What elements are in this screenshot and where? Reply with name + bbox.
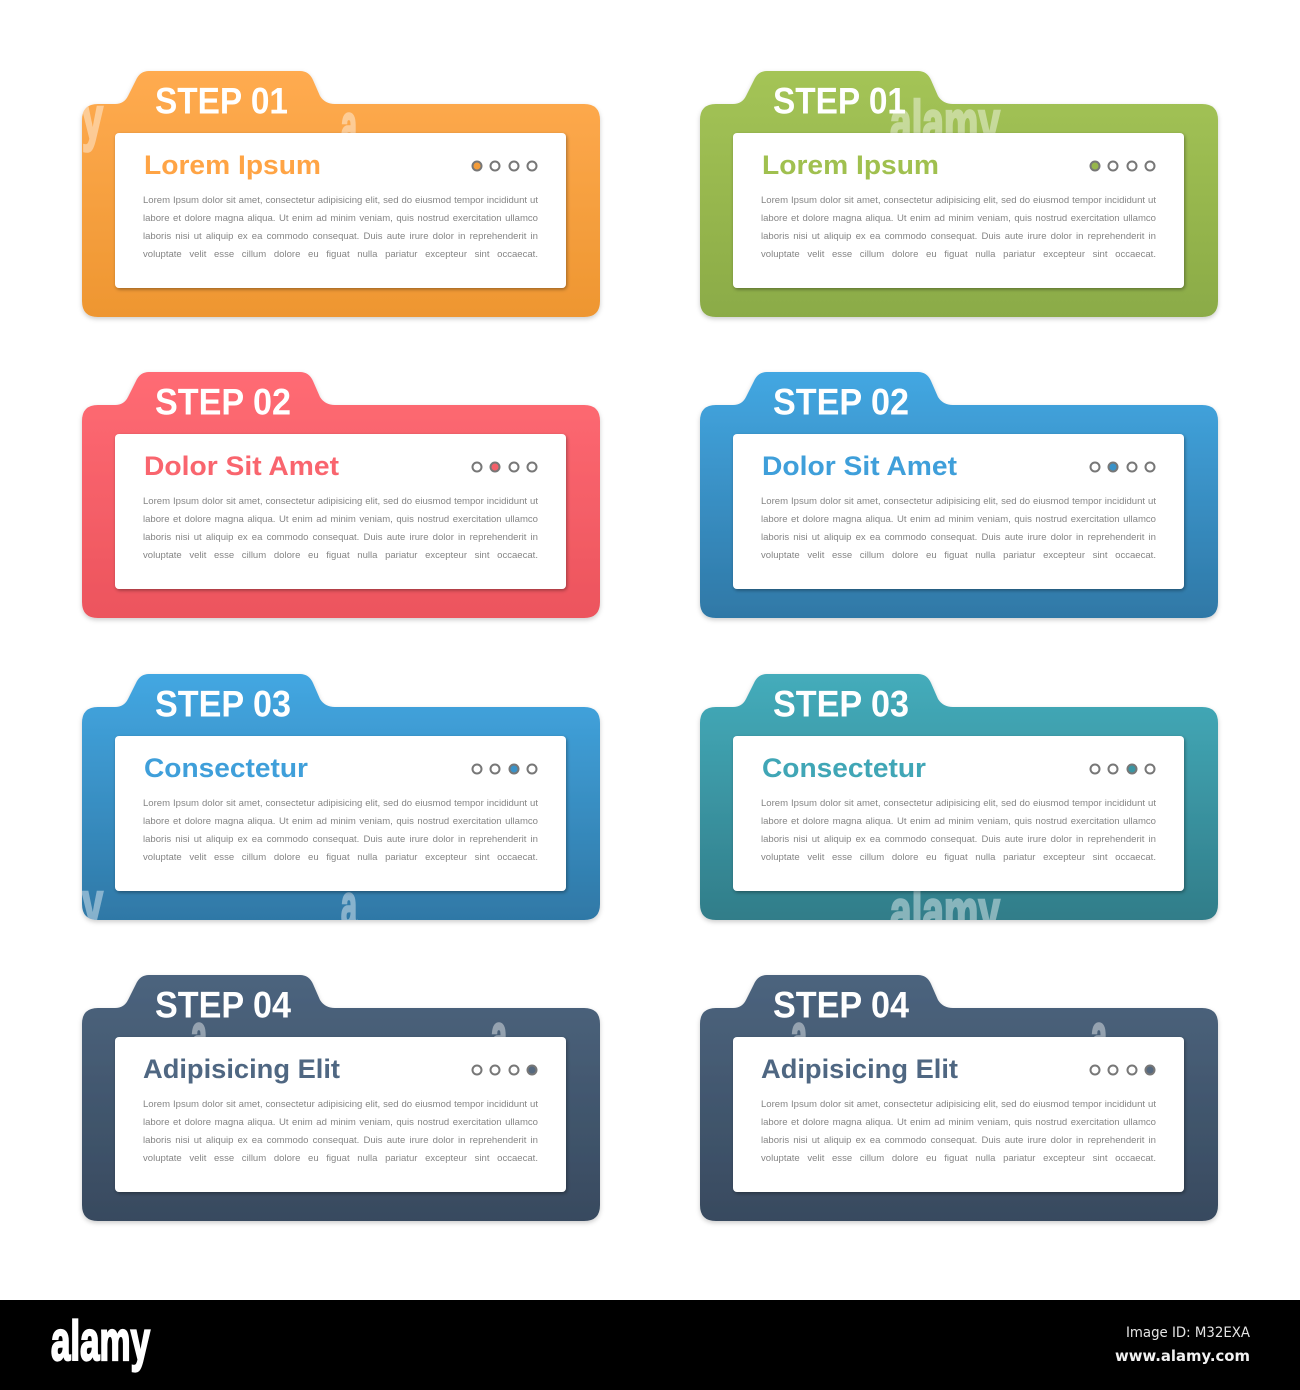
panel: blue step 03 card: labore et dolore magna aliqua. Ut enim ad minim veniam, quis nostrud exercitation ullamco	[143, 816, 538, 827]
panel: teal step 03 card: Lorem Ipsum dolor sit amet, consectetur adipisicing elit, sed do eiusmod tempor incididunt ut	[761, 798, 1156, 809]
panel: orange step 01 card: Lorem Ipsum	[144, 150, 321, 180]
panel: blue step 02 card: voluptate velit esse cillum dolore eu figuat nulla pariatur excepteur sint occaecat.	[761, 550, 1156, 561]
panel: blue step 03 card	[80, 674, 602, 924]
panel: blue step 02 card: labore et dolore magna aliqua. Ut enim ad minim veniam, quis nostrud exercitation ullamco	[761, 514, 1156, 525]
panel: teal step 03 card: labore et dolore magna aliqua. Ut enim ad minim veniam, quis nostrud exercitation ullamco	[761, 816, 1156, 827]
panel: orange step 01 card	[80, 71, 602, 321]
panel: orange step 01 card: labore et dolore magna aliqua. Ut enim ad minim veniam, quis nostrud exercitation ullamco	[143, 213, 538, 224]
panel: teal step 03 card: alamy	[890, 878, 1000, 945]
panel: navy step 04 card right: STEP 04	[773, 984, 909, 1026]
website: www.alamy.com	[1115, 1347, 1250, 1365]
panel: blue step 03 card: Consectetur	[144, 753, 309, 783]
panel: navy step 04 card right: Lorem Ipsum dolor sit amet, consectetur adipisicing elit, sed do eiusmod tempor incididunt ut	[761, 1099, 1156, 1110]
panel: blue step 02 card: laboris nisi ut aliquip ex ea commodo consequat. Duis aute irure dolor in reprehenderit in	[761, 532, 1156, 543]
panel: orange step 01 card: a	[341, 92, 357, 159]
panel: green step 01 card: voluptate velit esse cillum dolore eu figuat nulla pariatur excepteur sint occaecat.	[761, 249, 1156, 260]
panel: green step 01 card: laboris nisi ut aliquip ex ea commodo consequat. Duis aute irure dolor in reprehenderit in	[761, 231, 1156, 242]
panel: navy step 04 card left: STEP 04	[155, 984, 291, 1026]
panel: blue step 03 card: a	[341, 872, 357, 939]
panel: navy step 04 card left: Adipisicing Elit	[143, 1054, 340, 1084]
panel: blue step 02 card: STEP 02	[773, 382, 909, 422]
panel: red step 02 card: voluptate velit esse cillum dolore eu figuat nulla pariatur excepteur sint occaecat.	[143, 550, 538, 561]
panel: red step 02 card	[80, 372, 602, 622]
panel: teal step 03 card: STEP 03	[773, 684, 909, 724]
panel: red step 02 card: Lorem Ipsum dolor sit amet, consectetur adipisicing elit, sed do eiusmod tempor incididunt ut	[143, 496, 538, 507]
panel: navy step 04 card left: laboris nisi ut aliquip ex ea commodo consequat. Duis aute irure dolor in reprehenderit in	[143, 1135, 538, 1146]
panel: orange step 01 card: voluptate velit esse cillum dolore eu figuat nulla pariatur excepteur sint occaecat.	[143, 249, 538, 260]
panel: navy step 04 card left: a	[191, 1002, 207, 1069]
panel: navy step 04 card right: laboris nisi ut aliquip ex ea commodo consequat. Duis aute irure dolor in reprehenderit in	[761, 1135, 1156, 1146]
panel: green step 01 card: labore et dolore magna aliqua. Ut enim ad minim veniam, quis nostrud exercitation ullamco	[761, 213, 1156, 224]
panel: blue step 02 card: Lorem Ipsum dolor sit amet, consectetur adipisicing elit, sed do eiusmod tempor incididunt ut	[761, 496, 1156, 507]
panel: green step 01 card	[698, 71, 1220, 321]
panel: navy step 04 card right: a	[1091, 1002, 1107, 1069]
panel: green step 01 card: STEP 01	[773, 80, 906, 122]
panel: green step 01 card: alamy	[890, 89, 1000, 156]
panel: teal step 03 card: voluptate velit esse cillum dolore eu figuat nulla pariatur excepteur sint occaecat.	[761, 852, 1156, 863]
panel: teal step 03 card: Consectetur	[762, 753, 927, 783]
panel: navy step 04 card left: voluptate velit esse cillum dolore eu figuat nulla pariatur excepteur sint occaecat.	[143, 1153, 538, 1164]
footer bar	[0, 1300, 1300, 1390]
panel: blue step 03 card: Lorem Ipsum dolor sit amet, consectetur adipisicing elit, sed do eiusmod tempor incididunt ut	[143, 798, 538, 809]
panel: navy step 04 card right: Adipisicing Elit	[761, 1054, 958, 1084]
panel: blue step 02 card	[698, 372, 1220, 622]
panel: blue step 03 card: y	[82, 870, 103, 937]
panel: red step 02 card: Dolor Sit Amet	[144, 451, 339, 481]
panel: blue step 03 card: laboris nisi ut aliquip ex ea commodo consequat. Duis aute irure dolor in reprehenderit in	[143, 834, 538, 845]
panel: navy step 04 card right	[698, 975, 1220, 1225]
panel: navy step 04 card left: Lorem Ipsum dolor sit amet, consectetur adipisicing elit, sed do eiusmod tempor incididunt ut	[143, 1099, 538, 1110]
panel: navy step 04 card left: a	[491, 1002, 507, 1069]
panel: navy step 04 card right: a	[791, 1002, 807, 1069]
panel: teal step 03 card: laboris nisi ut aliquip ex ea commodo consequat. Duis aute irure dolor in reprehenderit in	[761, 834, 1156, 845]
panel: blue step 03 card: voluptate velit esse cillum dolore eu figuat nulla pariatur excepteur sint occaecat.	[143, 852, 538, 863]
panel: navy step 04 card left: labore et dolore magna aliqua. Ut enim ad minim veniam, quis nostrud exercitation ullamco	[143, 1117, 538, 1128]
panel: orange step 01 card: Lorem Ipsum dolor sit amet, consectetur adipisicing elit, sed do eiusmod tempor incididunt ut	[143, 195, 538, 206]
panel: teal step 03 card	[698, 674, 1220, 924]
panel: navy step 04 card right: voluptate velit esse cillum dolore eu figuat nulla pariatur excepteur sint occaecat.	[761, 1153, 1156, 1164]
alamy logo: alamy	[51, 1309, 150, 1372]
image id: Image ID: M32EXA	[1126, 1325, 1250, 1341]
panel: orange step 01 card: y	[82, 85, 103, 152]
panel: red step 02 card: labore et dolore magna aliqua. Ut enim ad minim veniam, quis nostrud exercitation ullamco	[143, 514, 538, 525]
panel: orange step 01 card: laboris nisi ut aliquip ex ea commodo consequat. Duis aute irure dolor in reprehenderit in	[143, 231, 538, 242]
panel: navy step 04 card left	[80, 975, 602, 1225]
panel: blue step 03 card: STEP 03	[155, 684, 291, 724]
panel: navy step 04 card right: labore et dolore magna aliqua. Ut enim ad minim veniam, quis nostrud exercitation ullamco	[761, 1117, 1156, 1128]
panel: orange step 01 card: STEP 01	[155, 80, 288, 122]
panel: red step 02 card: laboris nisi ut aliquip ex ea commodo consequat. Duis aute irure dolor in reprehenderit in	[143, 532, 538, 543]
panel: green step 01 card: Lorem Ipsum dolor sit amet, consectetur adipisicing elit, sed do eiusmod tempor incididunt ut	[761, 195, 1156, 206]
panel: green step 01 card: Lorem Ipsum	[762, 150, 939, 180]
panel: blue step 02 card: Dolor Sit Amet	[762, 451, 957, 481]
panel: red step 02 card: STEP 02	[155, 382, 291, 422]
